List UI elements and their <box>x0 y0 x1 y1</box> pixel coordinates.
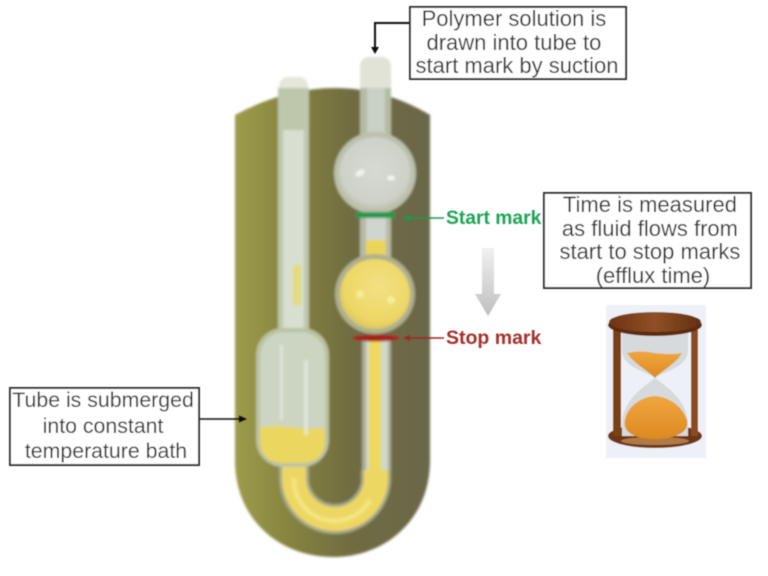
glass <box>622 330 688 436</box>
left post <box>613 330 621 436</box>
lower bulb filled with polymer solution <box>335 254 415 334</box>
callout: polymer solution: start mark by suction <box>416 53 618 78</box>
callout: time measured: (efflux time) <box>596 263 710 288</box>
upper sand <box>627 352 682 378</box>
top disk <box>608 314 702 336</box>
label: stop mark: Stop mark <box>446 327 542 349</box>
arrow: flow direction <box>475 248 501 316</box>
stop mark band <box>352 334 400 342</box>
callout: time measured: as fluid flows from <box>562 216 738 241</box>
callout: time measured: start to stop marks <box>559 239 740 264</box>
constant temperature bath <box>235 88 430 557</box>
icon: hourglass <box>606 305 706 458</box>
start mark band <box>356 212 395 218</box>
diagram: viscometer tube in bath <box>235 57 430 557</box>
arrow: suction into tube <box>371 23 409 54</box>
callout: time measured: Time is measured <box>563 192 737 217</box>
middle tube with fluid level <box>360 212 391 270</box>
callout: polymer solution <box>410 6 626 79</box>
lower sand <box>625 396 687 439</box>
callout: tube submerged: temperature bath <box>25 439 187 463</box>
reservoir bulb <box>256 328 329 467</box>
callout: tube submerged: into constant <box>43 414 164 438</box>
left tube cap above bath <box>279 77 308 101</box>
leader arrows and labels <box>10 6 751 465</box>
callout: tube submerged <box>10 388 200 465</box>
left tube stem <box>278 88 309 333</box>
base <box>608 424 702 448</box>
U bend <box>294 462 376 521</box>
right post <box>691 330 698 436</box>
callout: time measured <box>544 192 751 288</box>
label: start mark: Start mark <box>446 208 542 229</box>
callout: tube submerged: Tube is submerged <box>12 388 194 412</box>
lower right tube <box>362 338 391 483</box>
callout: polymer solution: drawn into tube to <box>426 30 601 55</box>
arrow: bath pointer <box>199 416 247 422</box>
arrow: start mark leader <box>403 214 444 222</box>
callout: polymer solution: Polymer solution is <box>422 6 606 31</box>
right tube stem and upper bulb <box>334 88 416 214</box>
arrow: stop mark leader <box>403 335 444 341</box>
right tube cap above bath <box>360 57 391 107</box>
